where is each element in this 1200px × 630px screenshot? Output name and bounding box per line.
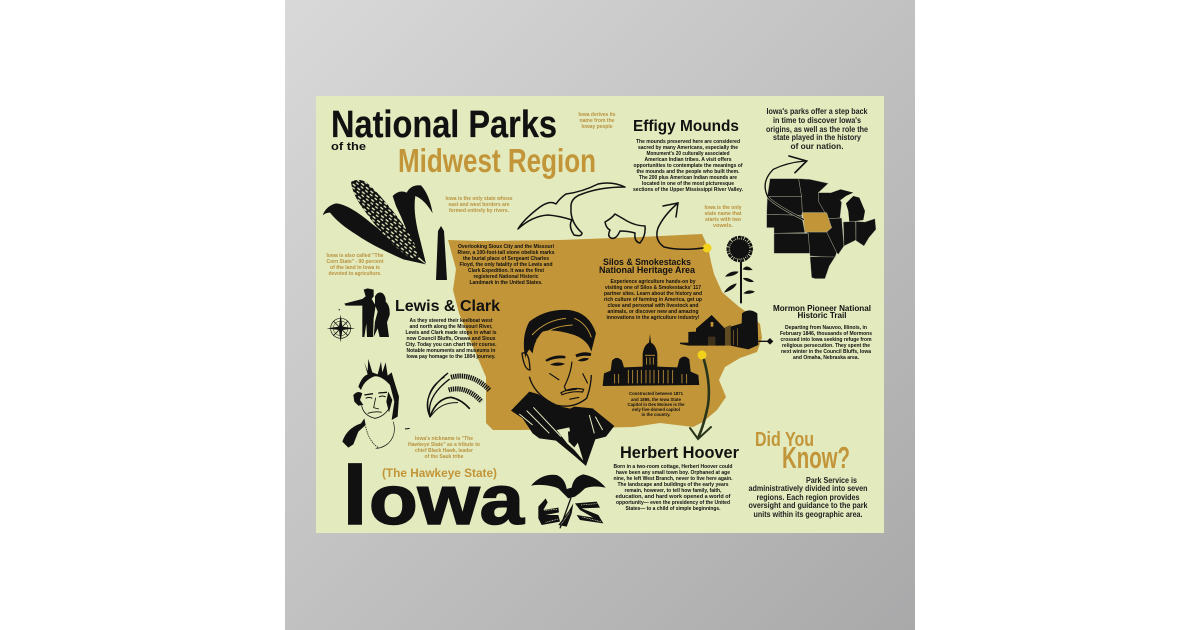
- fact: Hawkeye nickname: Iowa's nickname is "The: [415, 436, 473, 442]
- heading: Mormon Pioneer Trail: [773, 304, 871, 320]
- text: Silos and Smokestacks: innovations in the agriculture industry!: [606, 315, 700, 321]
- effigy bear outline: [605, 214, 645, 243]
- large title: Iowa: [343, 446, 525, 543]
- icon: corn: [323, 180, 433, 264]
- fact: Hawkeye nickname: chief Black Hawk, leader: [415, 448, 473, 454]
- heading: Silos and Smokestacks: National Heritage Area: [599, 265, 696, 276]
- text: Silos and Smokestacks: [604, 279, 703, 321]
- text: Sergeant Floyd monument: registered National Historic: [474, 274, 538, 280]
- text: Sergeant Floyd monument: River, a 100-foot-tall stone obelisk marks: [458, 250, 554, 256]
- text: Did You Know: units within its geographic area.: [754, 510, 862, 519]
- text: Effigy Mounds: The 200 plus American Indian mounds are: [639, 175, 737, 181]
- effigy bird outline: [518, 183, 625, 236]
- text: Effigy Mounds: Monument's 20 culturally associated: [646, 151, 730, 157]
- subtitle: of the: of the: [331, 141, 366, 153]
- text: Effigy Mounds: opportunities to contemplate the meanings of: [634, 163, 743, 169]
- icon: eagle with banner: [531, 474, 606, 528]
- fact: Corn State: Iowa is also called "The: [326, 253, 384, 259]
- text: Lewis and Clark: now Council Bluffs, Onawa and Sioux: [406, 336, 496, 342]
- text: Iowa's parks intro: in time to discover Iowa's: [773, 115, 861, 125]
- fact: Iowa name origin: Ioway people: [582, 124, 613, 130]
- fact: two vowels: starts with two: [705, 217, 741, 223]
- fact: Corn State: Corn State" - 90 percent: [326, 259, 384, 265]
- icon: Lewis and Clark silhouettes: [344, 288, 390, 337]
- text: Silos and Smokestacks: rich culture of farming in America, get up: [604, 297, 703, 303]
- text: Herbert Hoover: have been any small town boy. Orphaned at age: [616, 470, 730, 476]
- icon: obelisk: [436, 226, 447, 280]
- text: Capitol caption: Capitol in Des Moines is the: [628, 402, 685, 407]
- portrait: Herbert Hoover: [511, 310, 614, 466]
- map of Iowa: [448, 234, 762, 430]
- text: Capitol caption: only five-domed capitol: [632, 407, 680, 412]
- text: Herbert Hoover: [614, 464, 733, 512]
- text: Did You Know: Park Service is: [806, 476, 857, 485]
- text: Lewis and Clark: and north along the Missouri River,: [410, 324, 493, 330]
- text: Sergeant Floyd monument: Landmark in the United States.: [470, 280, 543, 286]
- text: Mormon Pioneer Trail: [780, 325, 872, 361]
- heading: Herbert Hoover: Herbert Hoover: [620, 444, 740, 462]
- text: Herbert Hoover: States— to a child of simple beginnings.: [626, 506, 721, 512]
- fact: Hawkeye nickname: of the Sauk tribe: [424, 454, 464, 460]
- fact: two vowels: [704, 205, 742, 229]
- text: Lewis and Clark: Iowa pay homage to the 1804 journey.: [406, 354, 496, 360]
- text: Effigy Mounds: sections of the Upper Mississippi River Valley.: [633, 187, 743, 193]
- text: Sergeant Floyd monument: Floyd, the only fatality of the Lewis and: [460, 262, 552, 268]
- text: Mormon Pioneer Trail: next winter in the Council Bluffs, Iowa: [781, 349, 872, 355]
- heading: Silos and Smokestacks: Silos & Smokestacks: [603, 257, 691, 268]
- fact: Hawkeye nickname: [408, 436, 480, 460]
- text: Iowa's parks intro: [766, 106, 868, 151]
- text: Lewis and Clark: Notable monuments and museums in: [406, 348, 496, 354]
- gray wall background: [285, 0, 915, 630]
- text: Mormon Pioneer Trail: and Omaha, Nebraska area.: [793, 355, 859, 361]
- arrow to Effigy Mounds: [657, 203, 712, 252]
- text: Capitol caption: [628, 391, 685, 417]
- icon: compass rose: [327, 309, 355, 342]
- poster panel: [316, 96, 884, 533]
- text: Sergeant Floyd monument: the burial place of Sergeant Charles: [463, 256, 549, 262]
- fact: Iowa name origin: Iowa derives its: [578, 112, 616, 118]
- text: Iowa's parks intro: origins, as well as the role the: [766, 124, 868, 134]
- text: Silos and Smokestacks: partner sites. Learn about the history and: [604, 291, 702, 297]
- fact: state borders: formed entirely by rivers.: [449, 208, 510, 214]
- text: Herbert Hoover: opportunity— even the presidency of the United: [616, 500, 730, 506]
- fact: state borders: [446, 196, 513, 214]
- portrait: Chief Black Hawk: [342, 359, 410, 448]
- large title: Iowa: I: [343, 446, 367, 543]
- text: Iowa's parks intro: Iowa's parks offer a step back: [766, 106, 868, 116]
- text: Effigy Mounds: American Indian tribes. A visit offers: [644, 157, 732, 163]
- title: National Parks: National Parks: [331, 104, 557, 146]
- text: Did You Know: regions. Each region provides: [756, 493, 860, 502]
- fact: two vowels: Iowa is the only: [704, 205, 742, 211]
- text: Lewis and Clark: Lewis and Clark made stops in what is: [406, 330, 496, 336]
- text: Effigy Mounds: The mounds preserved here are considered: [636, 139, 740, 145]
- heading: Lewis and Clark: Lewis & Clark: [395, 298, 500, 315]
- text: Capitol caption: Constructed between 1871: [629, 391, 683, 396]
- text: Herbert Hoover: nine, he left West Branch, never to live here again.: [614, 476, 733, 482]
- text: Effigy Mounds: the mounds and the people who built them.: [636, 169, 740, 175]
- text: Mormon Pioneer Trail: religious persecution. They spent the: [782, 343, 870, 349]
- icon: wheat: [427, 373, 489, 417]
- fact: state borders: Iowa is the only state whose: [446, 196, 513, 202]
- text: Herbert Hoover: Born in a two-room cottage, Herbert Hoover could: [614, 464, 732, 470]
- heading: Mormon Pioneer Trail: Historic Trail: [798, 311, 846, 320]
- text: Effigy Mounds: [633, 139, 743, 193]
- heading: Silos and Smokestacks: [599, 257, 696, 276]
- text: Effigy Mounds: located in one of the most picturesque: [642, 181, 734, 187]
- arrow to Midwest map: [765, 156, 807, 219]
- icon: barn and silo: [680, 310, 773, 349]
- fact: Hawkeye nickname: Hawkeye State" as a tribute to: [408, 442, 480, 448]
- text: Silos and Smokestacks: animals, or discover new and amazing: [608, 309, 698, 315]
- text: Herbert Hoover: education, and hard work opened a world of: [616, 494, 731, 500]
- text: Sergeant Floyd monument: Overlooking Sioux City and the Missouri: [458, 244, 554, 250]
- text: Herbert Hoover: The landscape and buildings of the early years: [618, 482, 728, 488]
- text: Lewis and Clark: City. Today you can chart their course.: [406, 342, 497, 348]
- text: Capitol caption: in the country.: [642, 412, 670, 417]
- heading: Effigy Mounds: Effigy Mounds: [633, 118, 739, 135]
- fact: Iowa name origin: name from the: [580, 118, 615, 124]
- fact: Corn State: [326, 253, 384, 277]
- text: Silos and Smokestacks: Experience agriculture hands-on by: [610, 279, 696, 285]
- fact: Iowa name origin: [578, 112, 616, 130]
- fact: two vowels: state name that: [704, 211, 742, 217]
- large title: Iowa: owa: [369, 461, 525, 539]
- text: Did You Know: administratively divided into seven: [748, 484, 868, 493]
- fact: Corn State: devoted to agriculture.: [328, 271, 382, 277]
- text: Mormon Pioneer Trail: February 1846, thousands of Mormons: [780, 331, 872, 337]
- illustration: Iowa State Capitol: [603, 334, 699, 386]
- fact: state borders: east and west borders are: [448, 202, 510, 208]
- text: Silos and Smokestacks: visiting one of Silos & Smokestacks' 117: [605, 285, 701, 291]
- text: Lewis and Clark: [406, 318, 497, 360]
- subtitle: Midwest Region: Midwest Region: [398, 142, 596, 179]
- text: Mormon Pioneer Trail: Departing from Nauvoo, Illinois, in: [785, 325, 867, 331]
- text: Lewis and Clark: As they steered their keelboat west: [410, 318, 493, 324]
- heading: Did You Know: Know?: [782, 440, 850, 475]
- Midwest region map: [767, 179, 876, 279]
- text: Iowa's parks intro: state played in the history: [773, 132, 861, 142]
- text: Silos and Smokestacks: close and personal with livestock and: [608, 303, 698, 309]
- text: Herbert Hoover: remain, however, to tell how family, faith,: [624, 488, 722, 494]
- heading: Did You Know: [755, 429, 850, 475]
- arrow to Herbert Hoover: [690, 350, 711, 439]
- text: Sergeant Floyd monument: [458, 244, 554, 286]
- text: Iowa's parks intro: of our nation.: [790, 141, 844, 151]
- heading: Mormon Pioneer Trail: Mormon Pioneer National: [773, 304, 871, 313]
- text: Effigy Mounds: sacred by many Americans, especially the: [638, 145, 738, 151]
- text: Capitol caption: and 1886, the Iowa State: [631, 397, 681, 402]
- icon: sunflower: [724, 237, 755, 303]
- text: Did You Know: oversight and guidance to the park: [748, 501, 868, 510]
- text: Did You Know: [748, 476, 868, 519]
- subtitle: The Hawkeye State: (The Hawkeye State): [382, 466, 497, 480]
- fact: two vowels: vowels.: [713, 223, 734, 229]
- text: Mormon Pioneer Trail: crossed into Iowa seeking refuge from: [780, 337, 872, 343]
- heading: Did You Know: Did You: [755, 429, 814, 451]
- text: Sergeant Floyd monument: Clark Expedition. It was the first: [468, 268, 544, 274]
- fact: Corn State: of the land in Iowa is: [330, 265, 380, 271]
